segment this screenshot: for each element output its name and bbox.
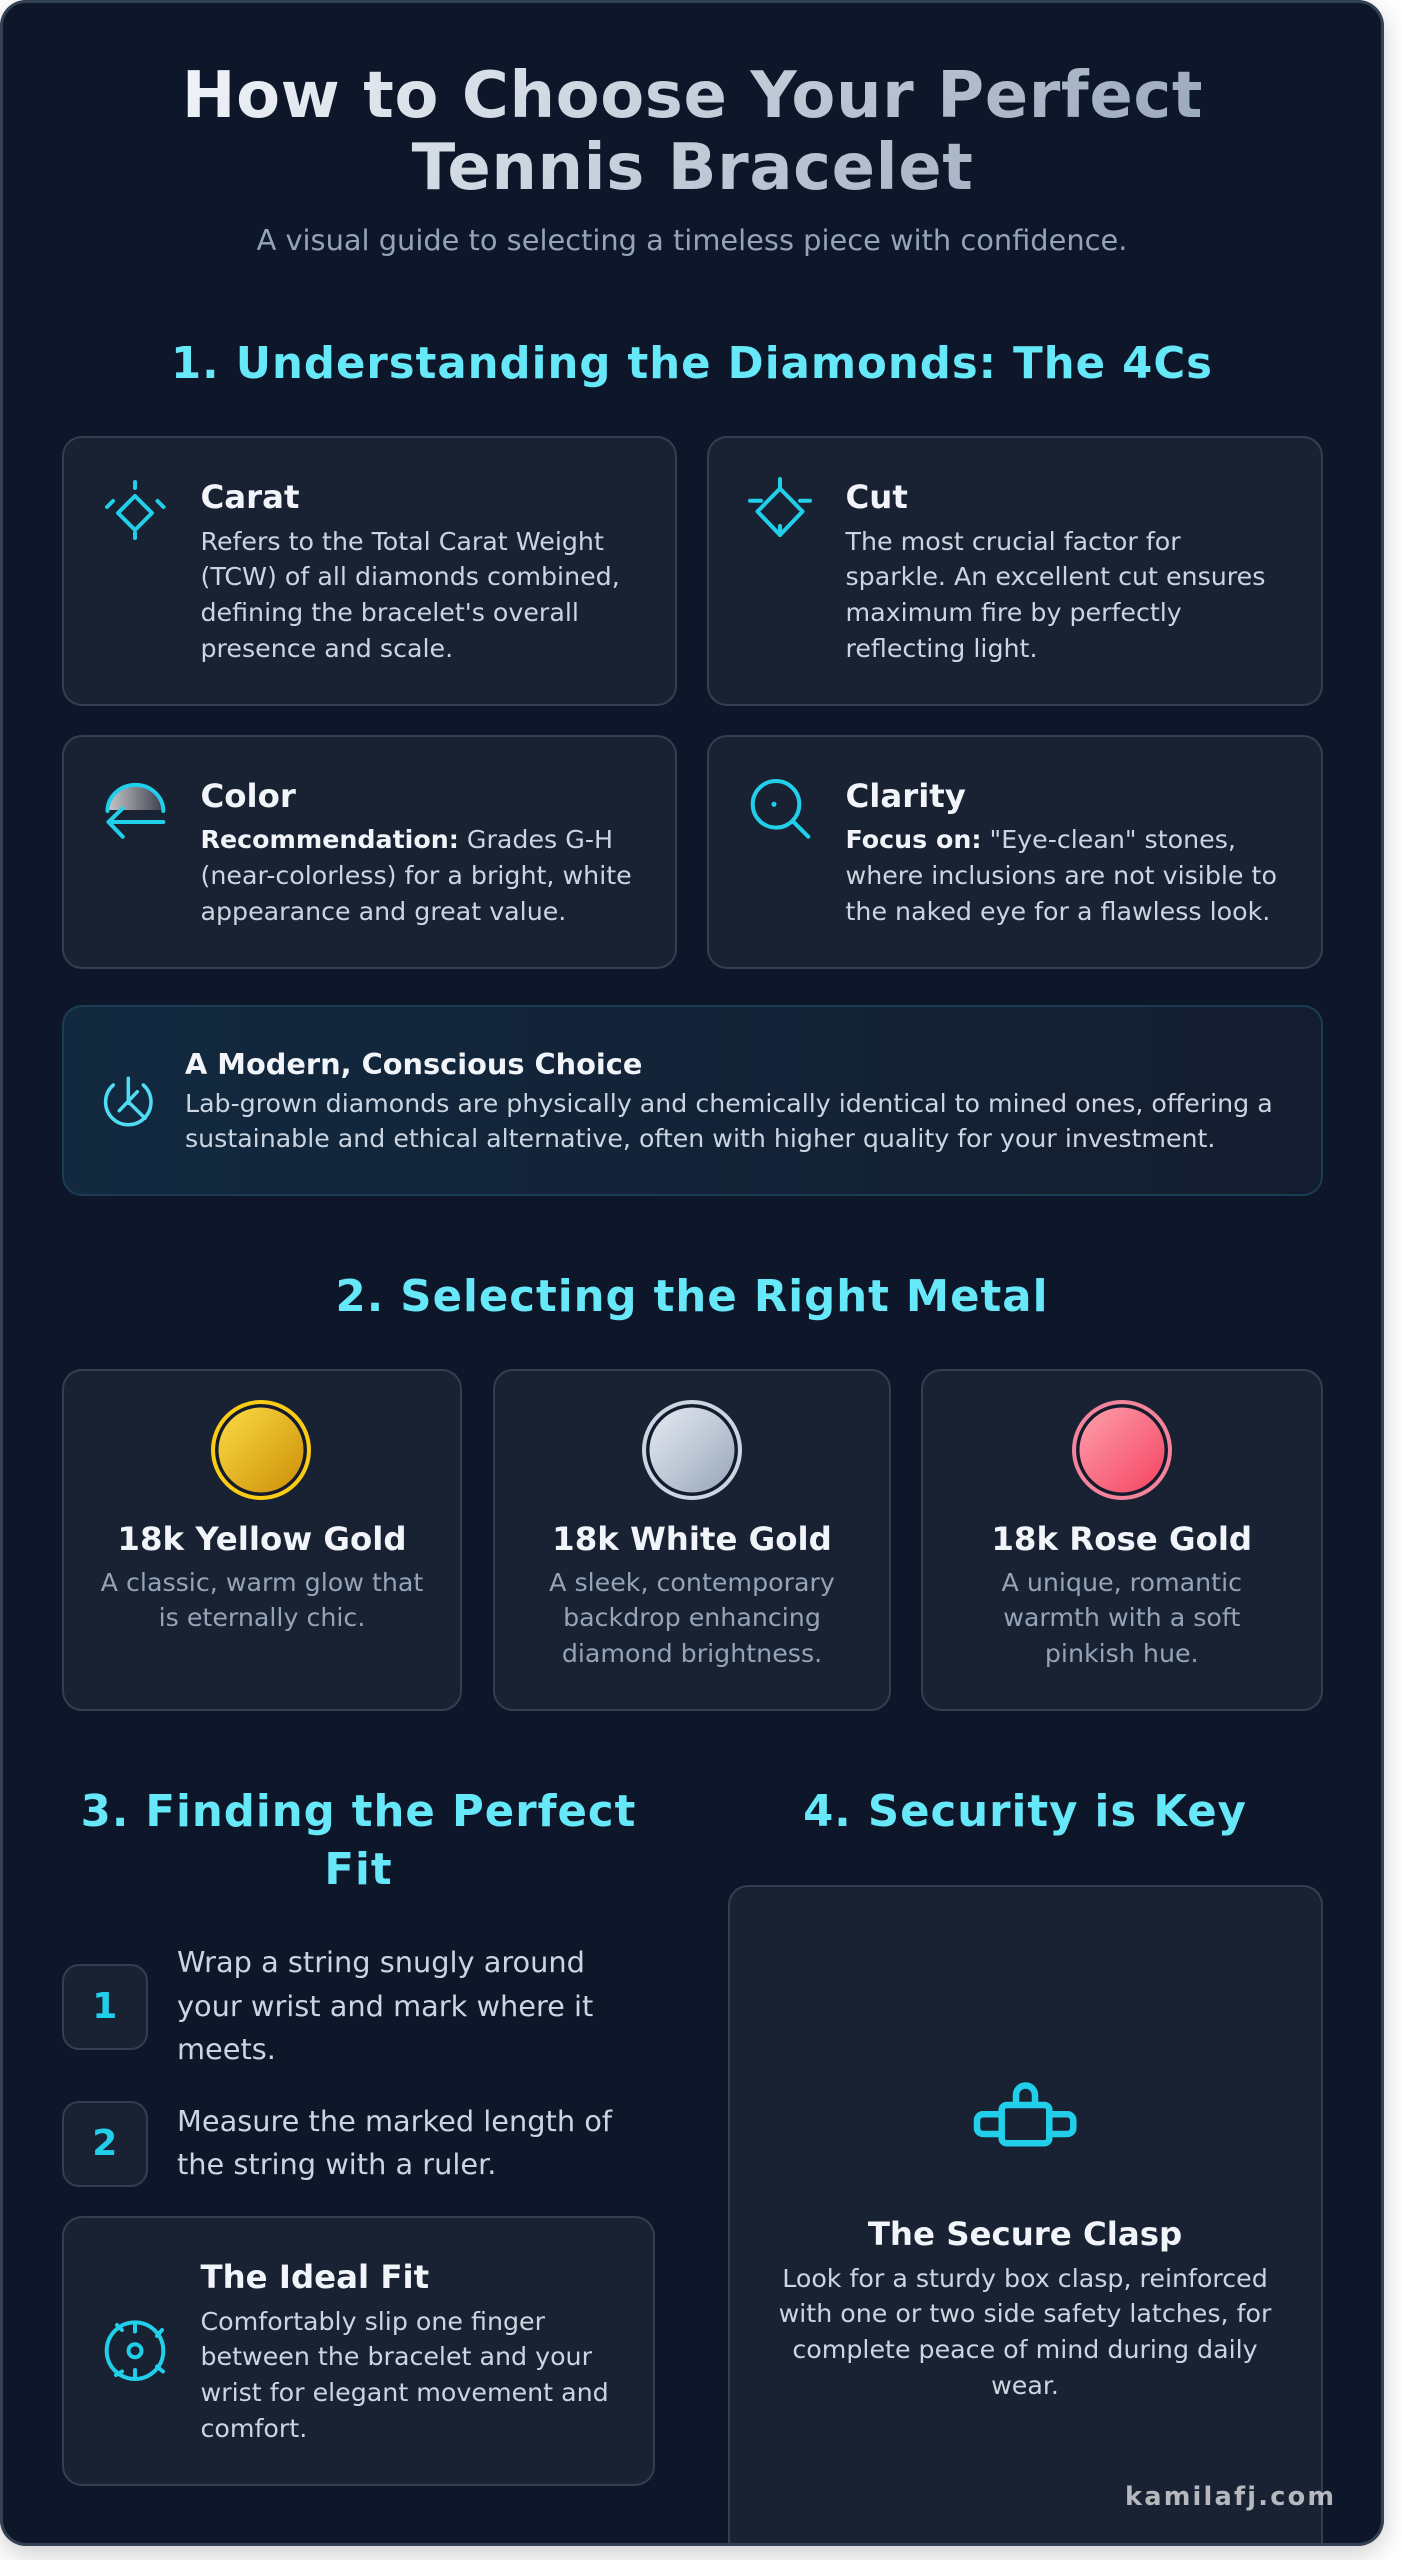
clarity title: Clarity <box>846 776 966 814</box>
ideal fit text: comfort. <box>200 2414 307 2443</box>
carat text: Refers to the Total Carat Weight <box>200 526 604 556</box>
color title: Color <box>200 776 296 814</box>
heading: section 2: 2. Selecting the Right Metal <box>336 1272 1048 1322</box>
color text: appearance and great value. <box>200 897 566 926</box>
clarity text: the naked eye for a flawless look. <box>846 897 1270 926</box>
ideal fit title: The Ideal Fit <box>200 2258 429 2296</box>
callout title: A Modern, Conscious Choice <box>185 1046 642 1080</box>
cut text: reflecting light. <box>846 634 1038 663</box>
panel: cut <box>706 436 1322 706</box>
title: Tennis Bracelet <box>412 130 973 204</box>
heading: section 3: 3. Finding the Perfect <box>81 1787 636 1837</box>
clasp text: with one or two side safety latches, for <box>779 2299 1271 2328</box>
color text: (near-colorless) for a bright, white <box>200 861 632 890</box>
white gold text <box>549 1568 835 1668</box>
step 1 text <box>177 1945 593 2066</box>
heading: section 3: Fit <box>324 1845 393 1895</box>
yellow gold text: A classic, warm glow that <box>101 1568 423 1596</box>
clarity text: Focus on: "Eye-clean" stones, <box>846 825 1236 854</box>
clarity text <box>846 825 1277 926</box>
carat text: presence and scale. <box>200 634 453 663</box>
title: How to Choose Your Perfect <box>182 58 1203 132</box>
cut text: maximum fire by perfectly <box>846 598 1182 627</box>
icon: yellow gold coin <box>211 1400 311 1500</box>
title <box>168 60 1216 204</box>
clasp text: wear. <box>991 2371 1059 2400</box>
white gold text: diamond brightness. <box>562 1639 822 1668</box>
icon: clasp <box>974 2082 1077 2146</box>
clarity text: where inclusions are not visible to <box>846 861 1277 890</box>
step 2 text: Measure the marked length of <box>177 2104 612 2138</box>
clasp text: complete peace of mind during daily <box>792 2335 1258 2364</box>
step 2 number: 2 <box>92 2123 117 2164</box>
panel: ideal fit <box>62 2216 655 2486</box>
heading: section 1: 1. Understanding the Diamonds: The 4Cs <box>171 339 1213 389</box>
cut text <box>845 526 1265 663</box>
rose gold text: A unique, romantic <box>1001 1568 1242 1596</box>
icon: carat diamond <box>104 480 166 540</box>
yellow gold title: 18k Yellow Gold <box>117 1520 407 1558</box>
cut text: sparkle. An excellent cut ensures <box>846 562 1265 591</box>
clasp text: Look for a sturdy box clasp, reinforced <box>782 2264 1268 2292</box>
subtitle: A visual guide to selecting a timeless piece with confidence. <box>257 223 1127 257</box>
rose gold text: warmth with a soft <box>1003 1603 1240 1632</box>
white gold text: backdrop enhancing <box>563 1603 821 1632</box>
watermark: kamilafj.com <box>1125 2482 1336 2512</box>
ideal fit text <box>200 2306 609 2443</box>
callout text: sustainable and ethical alternative, often with higher quality for your investment. <box>185 1124 1215 1153</box>
ideal fit text: Comfortably slip one finger <box>200 2306 545 2336</box>
rose gold text: pinkish hue. <box>1045 1639 1199 1668</box>
white gold text: A sleek, contemporary <box>549 1568 835 1596</box>
carat text <box>200 526 620 663</box>
carat text: (TCW) of all diamonds combined, <box>200 562 620 591</box>
cut title: Cut <box>846 478 908 516</box>
step 2 text <box>177 2104 613 2181</box>
white gold title: 18k White Gold <box>552 1520 832 1558</box>
ideal fit text: wrist for elegant movement and <box>200 2378 609 2407</box>
color text: Recommendation: Grades G-H <box>200 825 613 854</box>
step 1 number <box>62 1964 148 2050</box>
icon: lab-grown <box>104 1076 153 1126</box>
panel: yellow gold <box>62 1369 462 1711</box>
step 1 text: Wrap a string snugly around <box>177 1945 585 1979</box>
panel: white gold <box>493 1369 891 1711</box>
panel: carat <box>62 436 677 706</box>
carat text: defining the bracelet's overall <box>200 598 579 627</box>
panel: secure clasp <box>728 1885 1322 2560</box>
color text <box>200 825 632 926</box>
carat title: Carat <box>200 478 299 516</box>
panel: lab-grown callout <box>62 1005 1322 1196</box>
clasp title: The Secure Clasp <box>868 2214 1182 2252</box>
step 2 number <box>62 2101 148 2186</box>
step 1 text: your wrist and mark where it <box>177 1988 593 2022</box>
step 2 text: the string with a ruler. <box>177 2147 496 2181</box>
step 1 number: 1 <box>92 1986 117 2027</box>
icon: white gold coin <box>642 1400 742 1500</box>
yellow gold text <box>100 1568 423 1632</box>
icon: ideal fit target <box>104 2320 166 2381</box>
cut text: The most crucial factor for <box>846 526 1181 556</box>
rose gold title: 18k Rose Gold <box>991 1520 1252 1558</box>
ideal fit text: between the bracelet and your <box>200 2342 592 2371</box>
heading: section 3 <box>81 1787 636 1895</box>
panel: rose gold <box>921 1369 1322 1711</box>
icon: color dome and arrow <box>106 782 166 839</box>
heading: section 4: 4. Security is Key <box>803 1787 1247 1837</box>
yellow gold text: is eternally chic. <box>159 1603 365 1632</box>
step 1 text: meets. <box>177 2032 276 2066</box>
callout text: Lab-grown diamonds are physically and chemically identical to mined ones, offering a <box>185 1088 1273 1118</box>
icon: rose gold coin <box>1072 1400 1172 1500</box>
icon: cut diamond <box>748 477 812 538</box>
icon: clarity magnifier <box>750 779 810 839</box>
panel: color <box>62 735 677 969</box>
clasp text <box>779 2264 1272 2400</box>
panel: clarity <box>706 735 1322 969</box>
rose gold text <box>1001 1568 1242 1668</box>
callout text <box>185 1088 1273 1153</box>
